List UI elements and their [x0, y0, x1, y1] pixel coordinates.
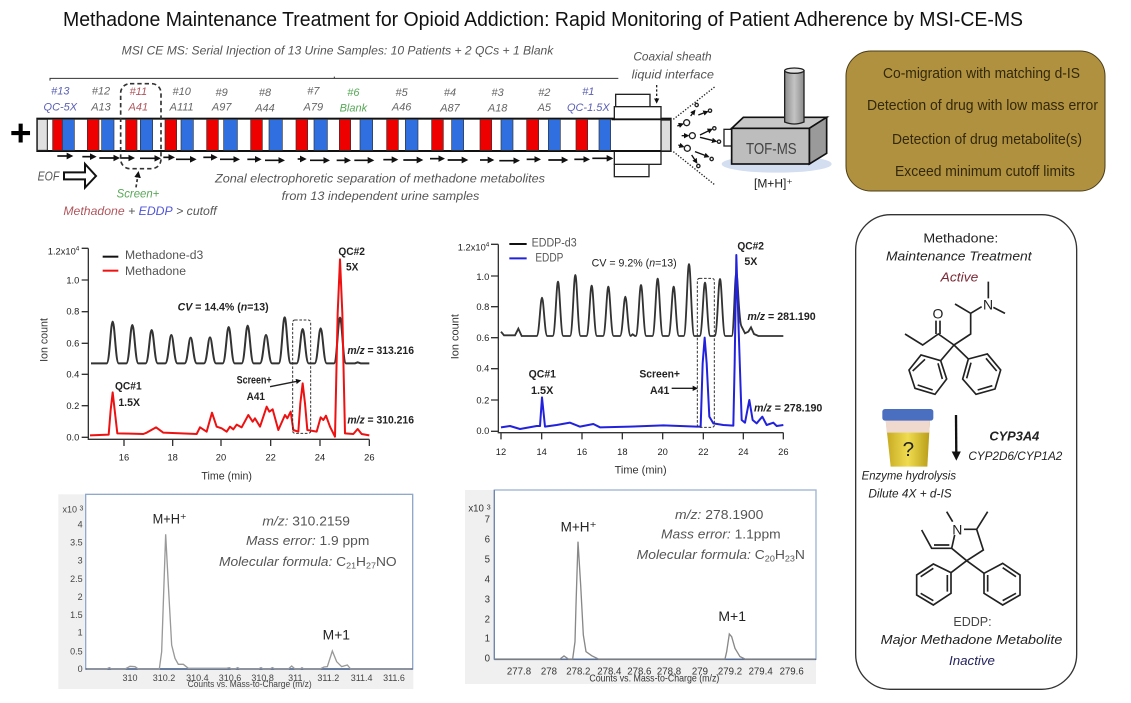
x tick labels: 12 [496, 447, 506, 457]
annotations: 1.5X [531, 385, 554, 397]
x tick labels: 24 [315, 453, 325, 463]
EDDP heading: Major Methadone Metabolite [881, 632, 1062, 647]
peak labels [153, 510, 350, 642]
annotations: QC#2 [737, 240, 764, 252]
ion label: [M+H]⁺ [754, 177, 793, 191]
methadone heading: Active [940, 270, 978, 285]
legend: Methadone-d3 [125, 248, 203, 262]
separation description: from 13 independent urine samples [282, 189, 479, 203]
spectrum annotation: H [356, 554, 366, 569]
EOF label and arrow [38, 164, 96, 188]
sample labels: A44 [254, 102, 275, 114]
axis titles: Time (min) [615, 464, 667, 476]
y tick labels: 0.8 [66, 307, 79, 317]
y tick labels: 3 [79, 505, 83, 512]
axis titles [449, 314, 667, 476]
sample labels: #10 [173, 86, 192, 98]
y tick labels: 0.0 [476, 426, 489, 436]
x tick labels: 279.4 [749, 666, 773, 677]
separation description: Zonal electrophoretic separation of methadone metabolites [214, 172, 545, 186]
annotations: QC#1 [115, 380, 142, 392]
annotations: A41 [247, 391, 265, 403]
y tick labels: 4 [76, 245, 80, 252]
sample labels: #6 [347, 87, 360, 99]
spectrum annotation: m/z: 278.1900 [675, 507, 763, 522]
annotations: 5X [744, 256, 758, 268]
x tick labels: 24 [738, 447, 749, 457]
spectrum annotation: 27 [366, 561, 376, 571]
y tick labels: 2.5 [70, 574, 83, 584]
y tick labels: 2 [78, 592, 83, 602]
y tick labels [468, 503, 491, 665]
methadone structure: N [983, 296, 993, 312]
legend: EDDP [535, 251, 563, 265]
x tick labels: 278 [541, 666, 557, 677]
y tick labels: 0 [485, 654, 490, 665]
x tick labels: 16 [577, 447, 587, 457]
panel: capillary electrophoresis schematic [10, 44, 832, 218]
plus sign: + [10, 111, 32, 153]
y tick labels: 6 [485, 534, 490, 545]
x tick labels: 277.8 [507, 666, 531, 677]
methadone trace [90, 259, 369, 437]
sample labels: #13 [51, 85, 70, 97]
coaxial label: Coaxial sheath [633, 50, 712, 64]
sample labels: #2 [538, 87, 550, 99]
axes [82, 248, 369, 446]
y tick labels: 0.4 [476, 364, 489, 374]
criteria list: Exceed minimum cutoff limits [895, 163, 1075, 180]
y tick labels: 1 [78, 628, 83, 638]
sample labels: QC-5X [44, 102, 78, 114]
y tick labels: 1.0 [476, 272, 489, 282]
annotations: Screen+ [237, 374, 272, 386]
x tick labels: 278.6 [627, 666, 651, 677]
y tick labels: 0 [78, 664, 83, 674]
x tick labels [507, 666, 804, 677]
x tick labels: 14 [536, 447, 547, 457]
methadone heading: Methadone: [923, 231, 998, 246]
annotations: A41 [650, 385, 669, 397]
y tick labels: x10 [62, 504, 77, 514]
chart: methadone electropherogram [38, 245, 414, 482]
enzyme labels: CYP2D6/CYP1A2 [968, 449, 1063, 463]
y tick labels: 1 [485, 634, 490, 645]
legend [509, 235, 577, 265]
spectrum annotation [637, 507, 805, 564]
y tick labels: 3.5 [70, 538, 83, 548]
sample labels: QC-1.5X [567, 102, 610, 114]
peak labels [561, 519, 746, 624]
annotations: QC#1 [529, 369, 556, 381]
sample labels: #11 [130, 86, 147, 98]
peak labels: M+1 [323, 626, 350, 642]
EDDP structure [917, 512, 1020, 605]
y tick labels: 3 [487, 503, 491, 512]
sample labels: #12 [92, 85, 110, 97]
x tick labels: 279.2 [718, 666, 742, 677]
x tick labels: 20 [657, 447, 668, 457]
x tick labels: 26 [778, 447, 789, 457]
enzyme labels: Dilute 4X + d-IS [868, 486, 952, 500]
EDDP heading: Inactive [949, 653, 995, 668]
chart: methadone mass spectrum [58, 494, 413, 689]
x tick labels: 22 [698, 447, 709, 457]
icon: urine sample cup [882, 409, 933, 467]
methadone structure [905, 282, 1005, 394]
y tick labels: 1.2x10 [458, 243, 486, 253]
axis titles: Ion count [38, 318, 50, 362]
sample labels: A97 [211, 102, 232, 114]
migration arrows [57, 156, 612, 161]
sample labels: #9 [216, 87, 228, 99]
spectrum annotation: Mass error: 1.1ppm [661, 526, 781, 541]
x tick labels [496, 447, 789, 457]
TOF-MS instrument: TOF-MS [746, 141, 797, 158]
screen positive callout: Screen+ [117, 187, 160, 200]
spectrum annotation: H [775, 547, 785, 562]
electrospray droplets [673, 87, 721, 185]
x axis title: Counts vs. Mass-to-Charge (m/z) [188, 679, 312, 689]
methadone-d3 trace [91, 317, 369, 363]
sample labels: #3 [492, 87, 505, 99]
enzyme labels [862, 430, 1063, 500]
axis titles: Ion count [449, 314, 461, 359]
TOF-MS instrument [722, 68, 832, 173]
coaxial label [632, 50, 714, 102]
panel: identification criteria [846, 51, 1105, 191]
x tick labels: 278.4 [597, 666, 622, 677]
x tick labels: 310.2 [153, 673, 175, 683]
y tick labels: 1.2x10 [48, 246, 76, 256]
coaxial label: liquid interface [632, 67, 714, 81]
sample labels: #1 [582, 86, 594, 98]
x tick labels: 26 [364, 453, 375, 463]
annotations [529, 240, 822, 415]
spectrum annotation: Molecular formula: C [219, 554, 346, 569]
plot background [58, 494, 413, 689]
EDDP structure: N [952, 521, 962, 537]
y tick labels: 4 [485, 574, 491, 585]
axis titles [38, 318, 252, 482]
y tick labels: 3 [78, 556, 83, 566]
criteria list: Detection of drug with low mass error [867, 97, 1098, 114]
spectrum trace [495, 542, 815, 659]
peak labels: M+H⁺ [561, 519, 597, 535]
y tick labels: x10 [468, 504, 484, 515]
x tick labels: 279 [692, 666, 708, 677]
annotations: CV = 9.2% (n=13) [592, 258, 677, 270]
y tick labels: 0.2 [66, 401, 79, 411]
x tick labels [122, 673, 405, 683]
x tick labels: 311 [288, 673, 302, 683]
arrow to A41 [270, 381, 300, 387]
peak labels: M+1 [718, 608, 746, 624]
y tick labels: 0.6 [66, 339, 79, 349]
coaxial sheath interface [612, 94, 671, 177]
spectrum trace [87, 534, 412, 669]
x tick labels: 310.8 [251, 673, 274, 683]
chart: EDDP electropherogram [449, 235, 822, 476]
sample labels: #8 [259, 87, 272, 99]
annotations: QC#2 [338, 246, 365, 258]
spectrum annotation: 21 [346, 561, 356, 571]
x axis title: Counts vs. Mass-to-Charge (m/z) [589, 674, 719, 685]
legend [103, 248, 203, 278]
spectrum annotation: m/z: 310.2159 [262, 514, 350, 529]
x tick labels: 18 [617, 447, 628, 457]
spectrum annotation: 23 [785, 554, 795, 564]
sample labels: A41 [128, 102, 148, 114]
sample labels: #5 [396, 87, 409, 99]
axes [491, 244, 783, 439]
annotations: CV = 14.4% (n=13) [178, 302, 269, 314]
annotations: m/z = 313.216 [347, 345, 414, 357]
annotations: 1.5X [118, 397, 141, 409]
y tick labels [458, 242, 490, 436]
annotations: m/z = 310.216 [347, 414, 414, 426]
EDDP heading [881, 614, 1062, 668]
criteria list: Co-migration with matching d-IS [883, 65, 1080, 82]
x tick labels: 16 [119, 453, 129, 463]
x tick labels [119, 453, 375, 463]
spectrum annotation: 20 [765, 554, 775, 564]
x tick labels: 278.2 [566, 666, 590, 677]
chart: EDDP mass spectrum [465, 490, 816, 685]
screen-positive window [293, 320, 311, 433]
capillary [37, 119, 671, 151]
screen positive callout [63, 173, 218, 218]
bracket [50, 77, 618, 81]
sample labels: A111 [169, 102, 194, 114]
sample labels: A13 [90, 102, 112, 114]
separation description [214, 172, 545, 203]
spectrum annotation: NO [376, 554, 397, 569]
x tick labels: 310 [122, 673, 137, 683]
sample labels: A5 [537, 102, 552, 114]
EDDP trace [501, 255, 783, 429]
annotations: m/z = 278.190 [754, 403, 822, 415]
annotations [115, 246, 414, 426]
plot background [465, 490, 816, 684]
x tick labels: 310.6 [219, 673, 241, 683]
y tick labels: 4 [486, 242, 490, 249]
spectrum annotation: Mass error: 1.9 ppm [246, 533, 369, 548]
criteria list: Detection of drug metabolite(s) [892, 131, 1082, 148]
EDDP heading: EDDP: [953, 614, 992, 629]
y tick labels: 2 [485, 614, 490, 625]
sample labels: A18 [487, 103, 508, 115]
heading: serial injection: MSI CE MS: Serial Injection of 13 Urine Samples: 10 Patients + 2 QCs + 1 Blank [122, 44, 554, 58]
y tick labels: 3 [485, 594, 490, 605]
x tick labels: 311.2 [317, 673, 339, 683]
spectrum annotation: Molecular formula: C [637, 547, 764, 562]
y tick labels: 1.5 [70, 610, 83, 620]
dashed selection around sample 11 [121, 84, 161, 169]
sample labels [44, 85, 610, 115]
annotations: Screen+ [639, 369, 680, 381]
y tick labels [62, 504, 83, 674]
sample labels: #4 [444, 87, 456, 99]
y tick labels: 4 [78, 520, 83, 530]
x tick labels: 279.6 [780, 666, 804, 677]
metabolism arrow [952, 415, 960, 458]
x tick labels: 311.4 [351, 673, 373, 683]
legend: Methadone [125, 264, 186, 278]
axis titles: Time (min) [201, 470, 252, 482]
y tick labels: 7 [485, 514, 490, 525]
y tick labels [48, 245, 80, 443]
y tick labels: 5 [485, 554, 490, 565]
x tick labels: 18 [167, 453, 178, 463]
sample labels: A46 [391, 102, 412, 114]
x tick labels: 311.6 [383, 673, 405, 683]
sample labels: A79 [303, 102, 323, 114]
title: Methadone Maintenance Treatment for Opioid Addiction: Rapid Monitoring of Patient Adherence by MSI-CE-MS [63, 9, 1023, 31]
methadone structure: O [933, 306, 944, 322]
sample labels: A87 [439, 103, 461, 115]
y tick labels: 0.0 [66, 433, 79, 443]
legend: EDDP-d3 [532, 235, 577, 249]
y tick labels: 0.4 [66, 370, 79, 380]
peak labels: M+H⁺ [153, 510, 187, 526]
EDDP-d3 trace [501, 264, 783, 336]
annotations: m/z = 281.190 [747, 311, 816, 323]
icon: urine sample cup: ? [903, 438, 914, 461]
enzyme labels: Enzyme hydrolysis [862, 468, 956, 482]
y tick labels: 0.6 [476, 333, 489, 343]
y tick labels: 0.5 [70, 647, 83, 657]
y tick labels: 0.8 [476, 302, 489, 312]
y tick labels: 0.2 [476, 395, 489, 405]
annotations: 5X [346, 262, 359, 274]
screen positive callout: Methadone + EDDP > cutoff [63, 204, 218, 218]
sample labels: #7 [307, 85, 320, 97]
spectrum annotation: N [795, 547, 805, 562]
enzyme labels: CYP3A4 [989, 430, 1039, 444]
panel: metabolism of methadone [856, 215, 1077, 689]
arrow to A41 [672, 386, 697, 390]
y tick labels: 1.0 [66, 275, 79, 285]
EOF label and arrow: EOF [38, 170, 60, 184]
x tick labels: 310.4 [186, 673, 209, 683]
sample labels: Blank [340, 102, 368, 114]
x tick labels: 278.8 [657, 666, 681, 677]
methadone heading: Maintenance Treatment [886, 249, 1033, 264]
screen-positive window [697, 278, 714, 427]
spectrum annotation [219, 514, 397, 571]
x tick labels: 22 [265, 453, 276, 463]
methadone heading [886, 231, 1033, 285]
criteria list [867, 65, 1098, 180]
x tick labels: 20 [216, 453, 226, 463]
